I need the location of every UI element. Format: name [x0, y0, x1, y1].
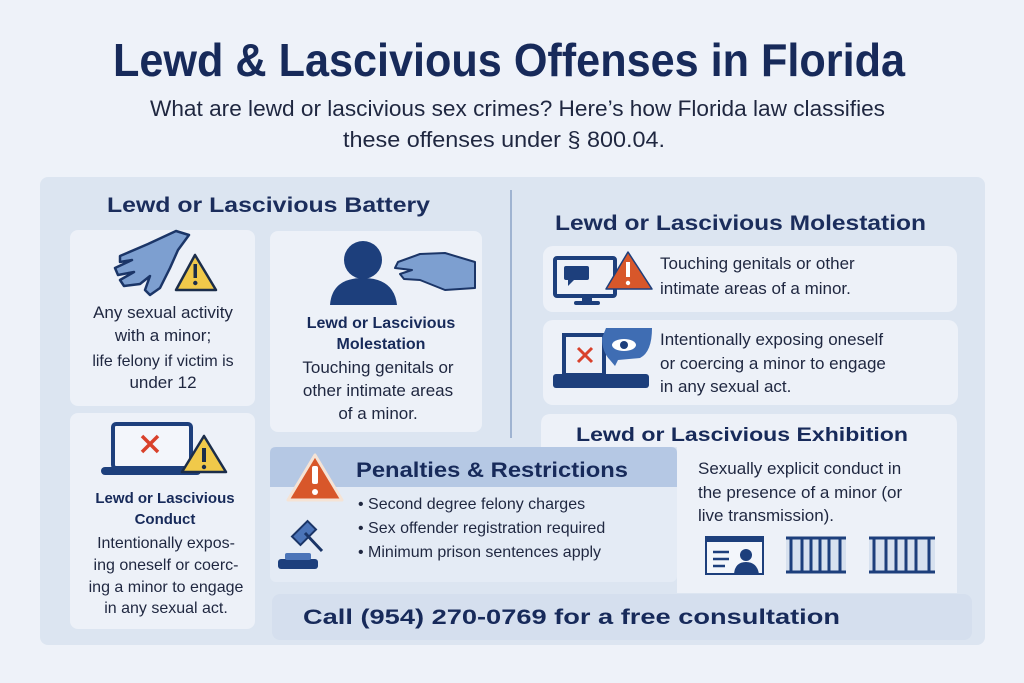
- text: conduct: Conduct: [135, 511, 195, 528]
- card: touching: [543, 246, 957, 312]
- icon: gavel: [278, 521, 322, 569]
- icon: person and hand: [330, 241, 475, 305]
- card: exhibition: [541, 414, 957, 593]
- heading: molestation right: Lewd or Lascivious Molestation: [555, 212, 926, 235]
- heading: penalties: Penalties & Restrictions: [356, 459, 628, 482]
- list: penalties: • Minimum prison sentences apply: [358, 544, 601, 561]
- subtitle: these offenses under § 800.04.: [343, 127, 665, 152]
- panel: penalties: [270, 447, 677, 582]
- text: molestation: Touching genitals or: [302, 358, 454, 377]
- text: conduct: Lewd or Lascivious: [95, 490, 235, 507]
- text: exhibition: the presence of a minor (or: [698, 483, 902, 502]
- list: penalties: [358, 496, 605, 561]
- text: exhibition: live transmission).: [698, 506, 834, 525]
- icon: laptop warning: [101, 424, 226, 475]
- text: battery description: with a minor;: [114, 326, 211, 345]
- text: exposing: [660, 330, 886, 396]
- text: conduct: Intentionally expos-: [97, 535, 235, 552]
- text: molestation: of a minor.: [338, 404, 418, 423]
- text: battery description: life felony if victim is: [92, 353, 234, 370]
- text: molestation: other intimate areas: [303, 381, 453, 400]
- text: battery description: under 12: [129, 373, 197, 392]
- card: molestation (left): [270, 231, 482, 432]
- text: molestation: Molestation: [337, 336, 425, 353]
- title: Lewd & Lascivious Offenses in Florida: [113, 34, 905, 86]
- icon: jail bars: [786, 537, 846, 573]
- icon: hand and warning: [115, 231, 216, 295]
- icon: id card: [706, 537, 763, 574]
- text: touching: intimate areas of a minor.: [660, 279, 851, 298]
- text: conduct: ing a minor to engage: [89, 579, 243, 596]
- callout: call bar: [272, 594, 972, 640]
- text: exhibition: Sexually explicit conduct in: [698, 459, 901, 478]
- text: conduct: ing oneself or coerc-: [94, 557, 238, 574]
- card: battery: [70, 230, 255, 406]
- heading: exhibition: Lewd or Lascivious Exhibition: [576, 425, 908, 446]
- heading: battery: Lewd or Lascivious Battery: [107, 194, 430, 217]
- subtitle: [150, 96, 885, 152]
- text: conduct: in any sexual act.: [104, 600, 228, 617]
- text: battery description: [92, 303, 234, 392]
- card: exposing: [543, 320, 958, 405]
- callout: call bar: Call (954) 270-0769 for a free consultation: [303, 606, 840, 629]
- text: exposing: or coercing a minor to engage: [660, 354, 886, 373]
- text: molestation: Lewd or Lascivious: [307, 315, 455, 332]
- text: molestation: [302, 315, 455, 423]
- list: penalties: • Second degree felony charges: [358, 496, 585, 513]
- icon: jail bars 2: [869, 537, 935, 573]
- subtitle: What are lewd or lascivious sex crimes? Here’s how Florida law classifies: [150, 96, 885, 121]
- icon: laptop eye: [553, 328, 652, 388]
- text: conduct: [89, 490, 243, 617]
- text: exposing: in any sexual act.: [660, 377, 791, 396]
- icon: monitor warning: [555, 252, 652, 305]
- text: touching: Touching genitals or other: [660, 254, 855, 273]
- main panel: [40, 177, 985, 645]
- text: exhibition: [698, 459, 902, 525]
- text: battery description: Any sexual activity: [93, 303, 233, 322]
- list: penalties: • Sex offender registration required: [358, 520, 605, 537]
- card: conduct: [70, 413, 255, 629]
- text: exposing: Intentionally exposing oneself: [660, 330, 883, 349]
- text: touching: [660, 254, 855, 298]
- icon: orange warning: [288, 455, 342, 500]
